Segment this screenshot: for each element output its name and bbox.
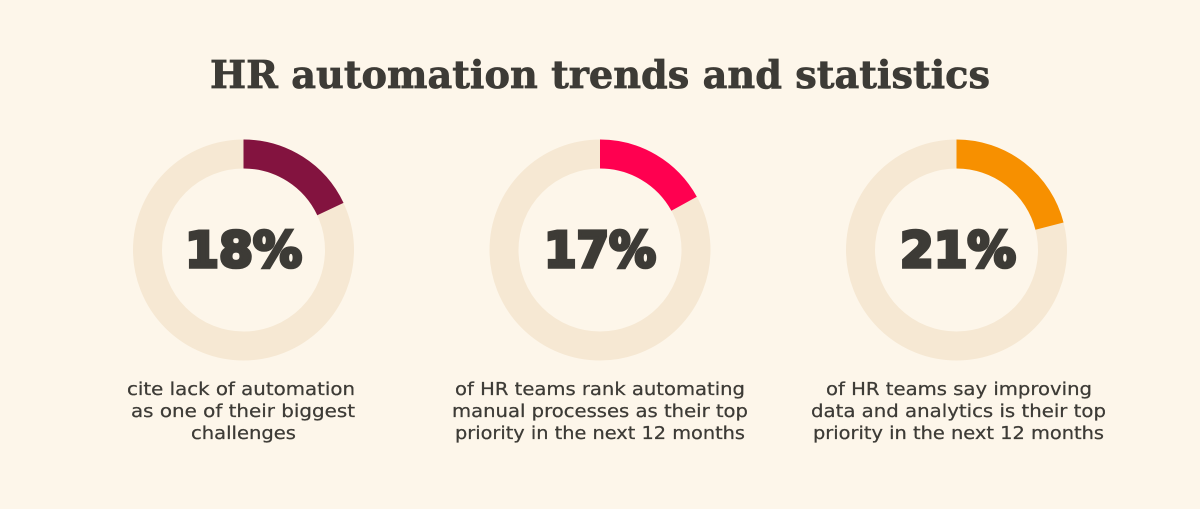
stat: 18%: 18% <box>185 222 302 279</box>
caption: automating manual processes: of HR teams rank automating <box>455 380 745 400</box>
donut chart: 21% <box>860 154 1052 346</box>
donut chart: 17% <box>504 154 696 346</box>
donut chart: 18% <box>148 154 340 346</box>
panel: 17% automating manual processes <box>452 154 748 444</box>
caption: improving data and analytics: data and analytics is their top <box>811 402 1106 422</box>
caption: improving data and analytics: of HR teams say improving <box>826 380 1092 400</box>
title: HR automation trends and statistics <box>210 52 990 97</box>
caption: lack of automation: as one of their biggest <box>131 402 355 422</box>
panel: 21% improving data and analytics <box>811 154 1106 444</box>
caption: improving data and analytics <box>811 380 1106 444</box>
caption: improving data and analytics: priority in the next 12 months <box>813 424 1104 444</box>
caption: automating manual processes: priority in the next 12 months <box>455 424 745 444</box>
caption: automating manual processes <box>452 380 748 444</box>
stat: 21%: 21% <box>900 222 1016 279</box>
caption: automating manual processes: manual processes as their top <box>452 402 748 422</box>
caption: lack of automation: challenges <box>191 424 296 444</box>
caption: lack of automation: cite lack of automation <box>127 380 355 400</box>
caption: lack of automation <box>127 380 355 444</box>
panel: 18% lack of automation <box>127 154 355 444</box>
stat: 17%: 17% <box>544 222 656 279</box>
